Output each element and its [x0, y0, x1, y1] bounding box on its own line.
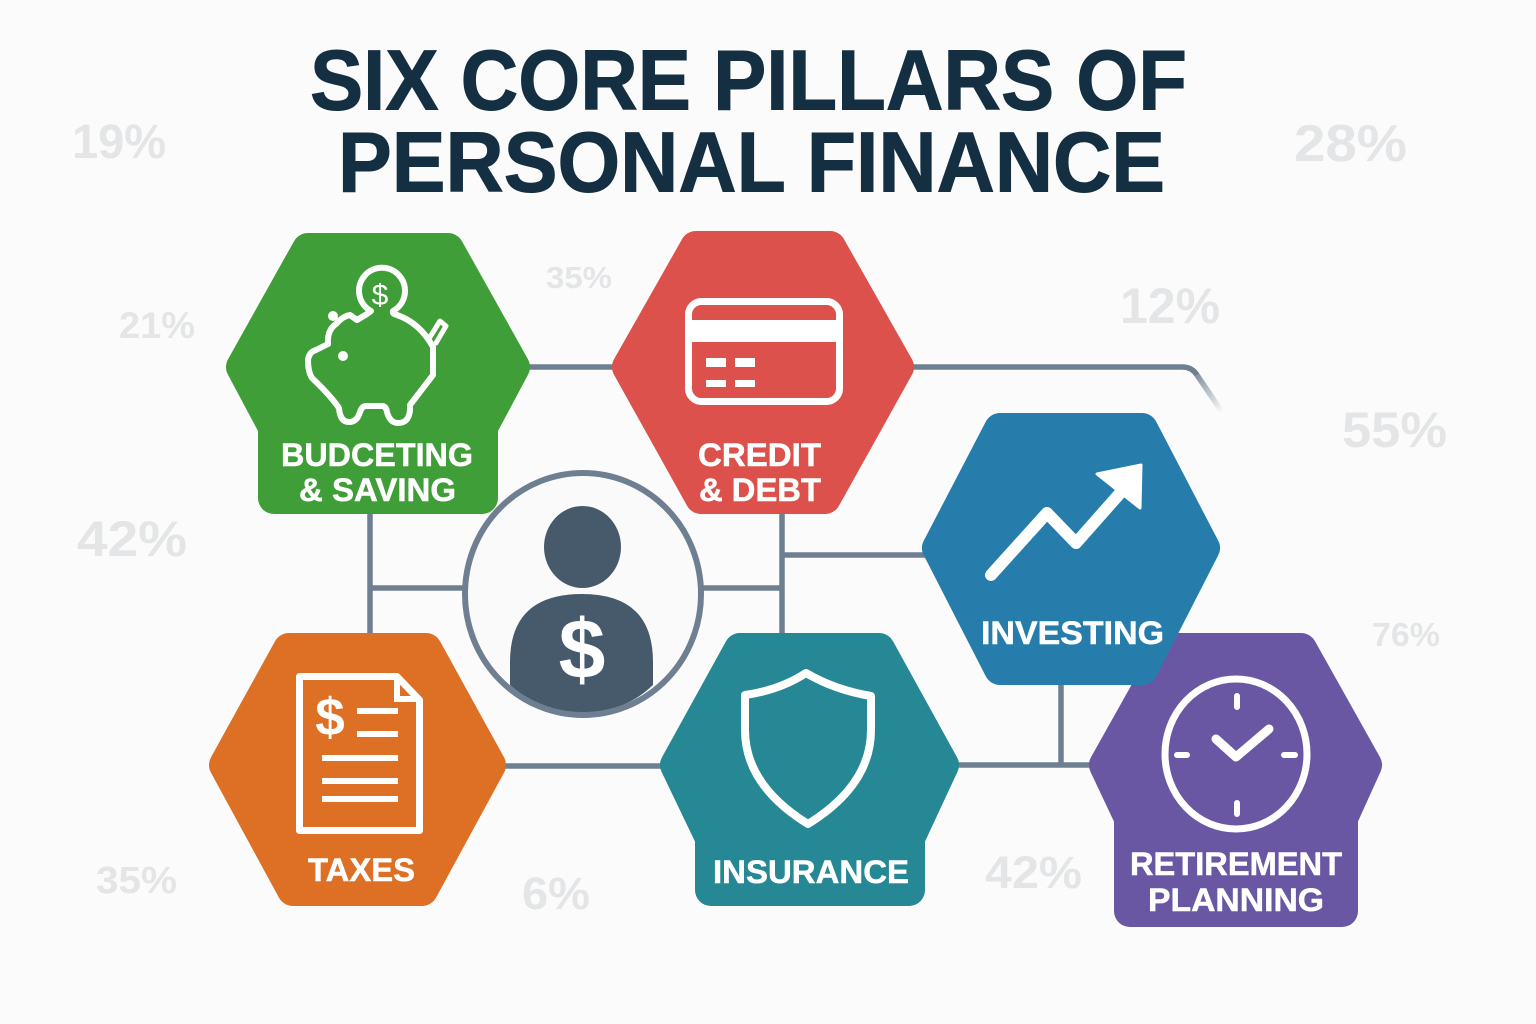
icon: piggy bank: [308, 268, 446, 423]
label: retirement planning: [1130, 846, 1342, 918]
label: retirement planning: RETIREMENT: [1130, 846, 1342, 882]
connector lines: [370, 367, 1222, 766]
title: PERSONAL FINANCE: [338, 116, 1165, 210]
label: credit and debt: CREDIT: [698, 437, 821, 473]
background percentage figures: 28%: [1294, 115, 1407, 173]
title: [310, 34, 1187, 210]
background percentage figures: 21%: [119, 305, 195, 346]
background percentage figures: 55%: [1342, 402, 1447, 458]
panel: investing: [938, 429, 1204, 669]
panel: budgeting and saving: [242, 249, 514, 508]
icon: tax document: $: [315, 688, 345, 747]
background percentage figures: 12%: [1120, 278, 1220, 334]
background percentage figures: [72, 115, 1447, 919]
label: insurance: INSURANCE: [713, 854, 909, 890]
icon: credit card: [688, 302, 840, 402]
icon: shield: [745, 673, 871, 824]
panel: credit and debt: [628, 247, 898, 508]
background percentage figures: 42%: [985, 847, 1082, 898]
background percentage figures: 76%: [1372, 616, 1440, 653]
label: taxes: TAXES: [308, 852, 415, 888]
label: credit and debt: & DEBT: [699, 472, 821, 508]
label: investing: INVESTING: [981, 615, 1164, 651]
background percentage figures: 35%: [546, 260, 612, 295]
icon: clock: [1165, 679, 1307, 829]
label: retirement planning: PLANNING: [1148, 882, 1324, 918]
panel: retirement planning: [1105, 649, 1366, 918]
icon: growth arrow: [991, 465, 1141, 575]
background percentage figures: 42%: [77, 511, 187, 567]
icon: piggy bank: $: [372, 279, 389, 312]
panel: taxes: [225, 649, 490, 890]
central person icon: $: [559, 602, 605, 696]
label: credit and debt: [698, 437, 821, 508]
label: budgeting and saving: & SAVING: [299, 472, 456, 508]
title: SIX CORE PILLARS OF: [310, 34, 1187, 128]
central person icon: [465, 473, 701, 715]
panel: insurance: [676, 649, 943, 890]
label: budgeting and saving: [281, 437, 473, 508]
background percentage figures: 19%: [72, 116, 166, 169]
background percentage figures: 35%: [96, 860, 177, 902]
icon: tax document: [300, 676, 420, 830]
label: budgeting and saving: BUDCETING: [281, 437, 473, 473]
background percentage figures: 6%: [522, 868, 590, 919]
